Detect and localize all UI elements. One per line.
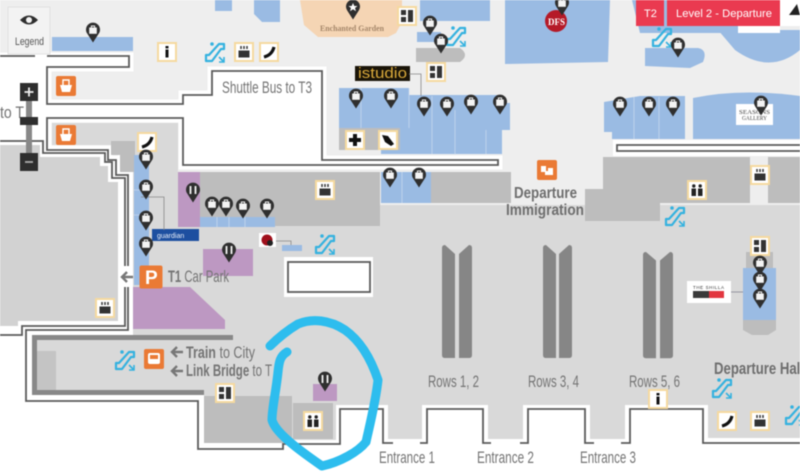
icon: first aid (346, 131, 364, 149)
red tab: Level 2 - Departure (667, 0, 780, 26)
corridor walls: train and link bridge (32, 335, 233, 395)
the shilla duty free logo: THE SHILLA (693, 285, 724, 290)
red tab: T2: T2 (644, 8, 657, 20)
leader lines (141, 74, 421, 245)
legend button: Legend (15, 36, 44, 48)
orange icon: bus (144, 349, 164, 369)
label: entrance 1: Entrance 1 (379, 448, 435, 467)
check-in rows pillars (442, 245, 673, 358)
label: entrance 2: Entrance 2 (477, 448, 534, 467)
orange icon: train 2 (56, 125, 76, 145)
legend button (8, 7, 50, 54)
the shilla duty free logo (687, 281, 743, 303)
zoom control (20, 83, 38, 171)
label: shuttle bus: Shuttle Bus to T3 (222, 78, 312, 97)
red flower logo (259, 233, 276, 247)
label: rows 3 4: Rows 3, 4 (528, 372, 579, 391)
label: departure immigration: Immigration (506, 202, 584, 219)
orange icon: immigration (537, 160, 557, 180)
left gray room (0, 145, 118, 326)
DFS logo: DFS (548, 17, 565, 27)
label: train to city: Train to City (186, 343, 255, 362)
seasons gallery logo: GALLERY (742, 116, 768, 122)
white void: left of hall top (118, 147, 133, 330)
peach: enchanted garden (300, 0, 402, 37)
label: departure immigration: Departure (514, 185, 577, 202)
label: to T3 cropped: to T (0, 103, 24, 122)
white block: hall structure (284, 257, 373, 297)
upper concourse floor (0, 0, 800, 206)
label: departure immigration (506, 185, 584, 219)
guardian logo: guardian (157, 233, 184, 240)
label: entrance 3: Entrance 3 (580, 448, 636, 467)
hand-drawn blue circle annotation (270, 321, 378, 466)
icon: leaf (379, 131, 397, 149)
orange icon: parking: P (145, 268, 158, 289)
star pin (346, 0, 360, 20)
purple food units (133, 172, 337, 401)
white strip around right wall (613, 140, 800, 156)
shop pins (86, 0, 768, 309)
label: T1 car park: T1 Car Park (168, 267, 229, 286)
seasons gallery logo: SEASONS (739, 110, 770, 116)
food pins (186, 183, 332, 392)
DFS logo (545, 10, 567, 32)
red tab: T2 (636, 0, 664, 26)
white void: shuttle bus corridor and room (0, 57, 498, 330)
red tab: Level 2 - Departure: Level 2 - Departure (676, 8, 772, 20)
guardian logo (152, 229, 199, 241)
main departure hall floor (37, 123, 800, 440)
escalator icons (116, 26, 800, 425)
arrows (122, 272, 183, 376)
darker service blocks (111, 141, 800, 443)
peach: enchanted garden: Enchanted Garden (320, 24, 385, 33)
seasons gallery logo (736, 104, 773, 125)
framed service icons (96, 7, 769, 430)
shilla unit ends (339, 48, 776, 335)
white box under tabs (738, 26, 780, 33)
istudio logo: istudio (358, 65, 407, 82)
orange icon: parking (140, 266, 162, 289)
orange icon: train (56, 76, 76, 96)
brand logo corner (780, 0, 800, 26)
label: rows 5 6: Rows 5, 6 (629, 372, 680, 391)
blue retail units (52, 0, 800, 320)
label: rows 1 2: Rows 1, 2 (428, 372, 479, 391)
label: link bridge: Link Bridge to T (186, 361, 272, 380)
